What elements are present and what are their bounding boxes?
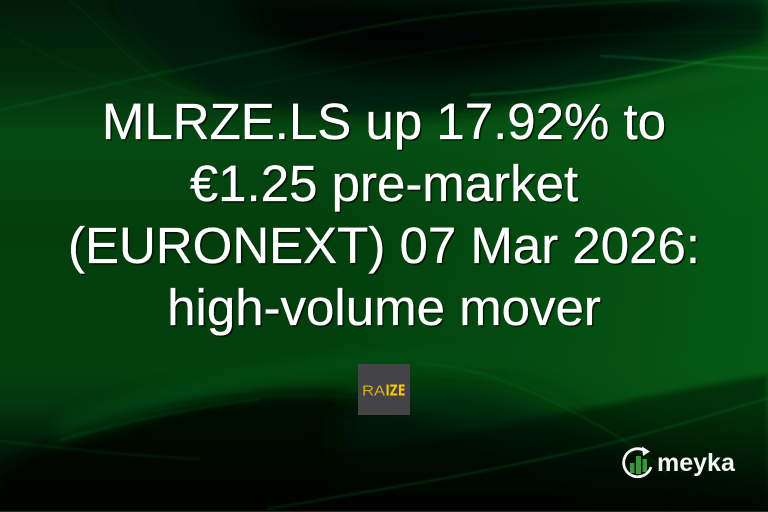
icon: meyka chart ring: [622, 446, 652, 478]
light streaks: [0, 0, 680, 110]
logo: RAIZE: RA: [362, 382, 385, 400]
upper dark swoop: [110, 0, 768, 116]
logo: RAIZE: [358, 364, 410, 415]
title: [68, 93, 700, 338]
bottom dark swoops: [0, 393, 590, 512]
brand: meyka: [622, 446, 736, 478]
title: (EURONEXT) 07 Mar 2026:: [68, 217, 700, 274]
title: MLRZE.LS up 17.92% to: [102, 93, 666, 150]
wordmark: meyka: [657, 449, 735, 477]
title: €1.25 pre-market: [190, 155, 578, 212]
bright band under upper swoop: [400, 57, 768, 140]
title: high-volume mover: [167, 279, 601, 336]
